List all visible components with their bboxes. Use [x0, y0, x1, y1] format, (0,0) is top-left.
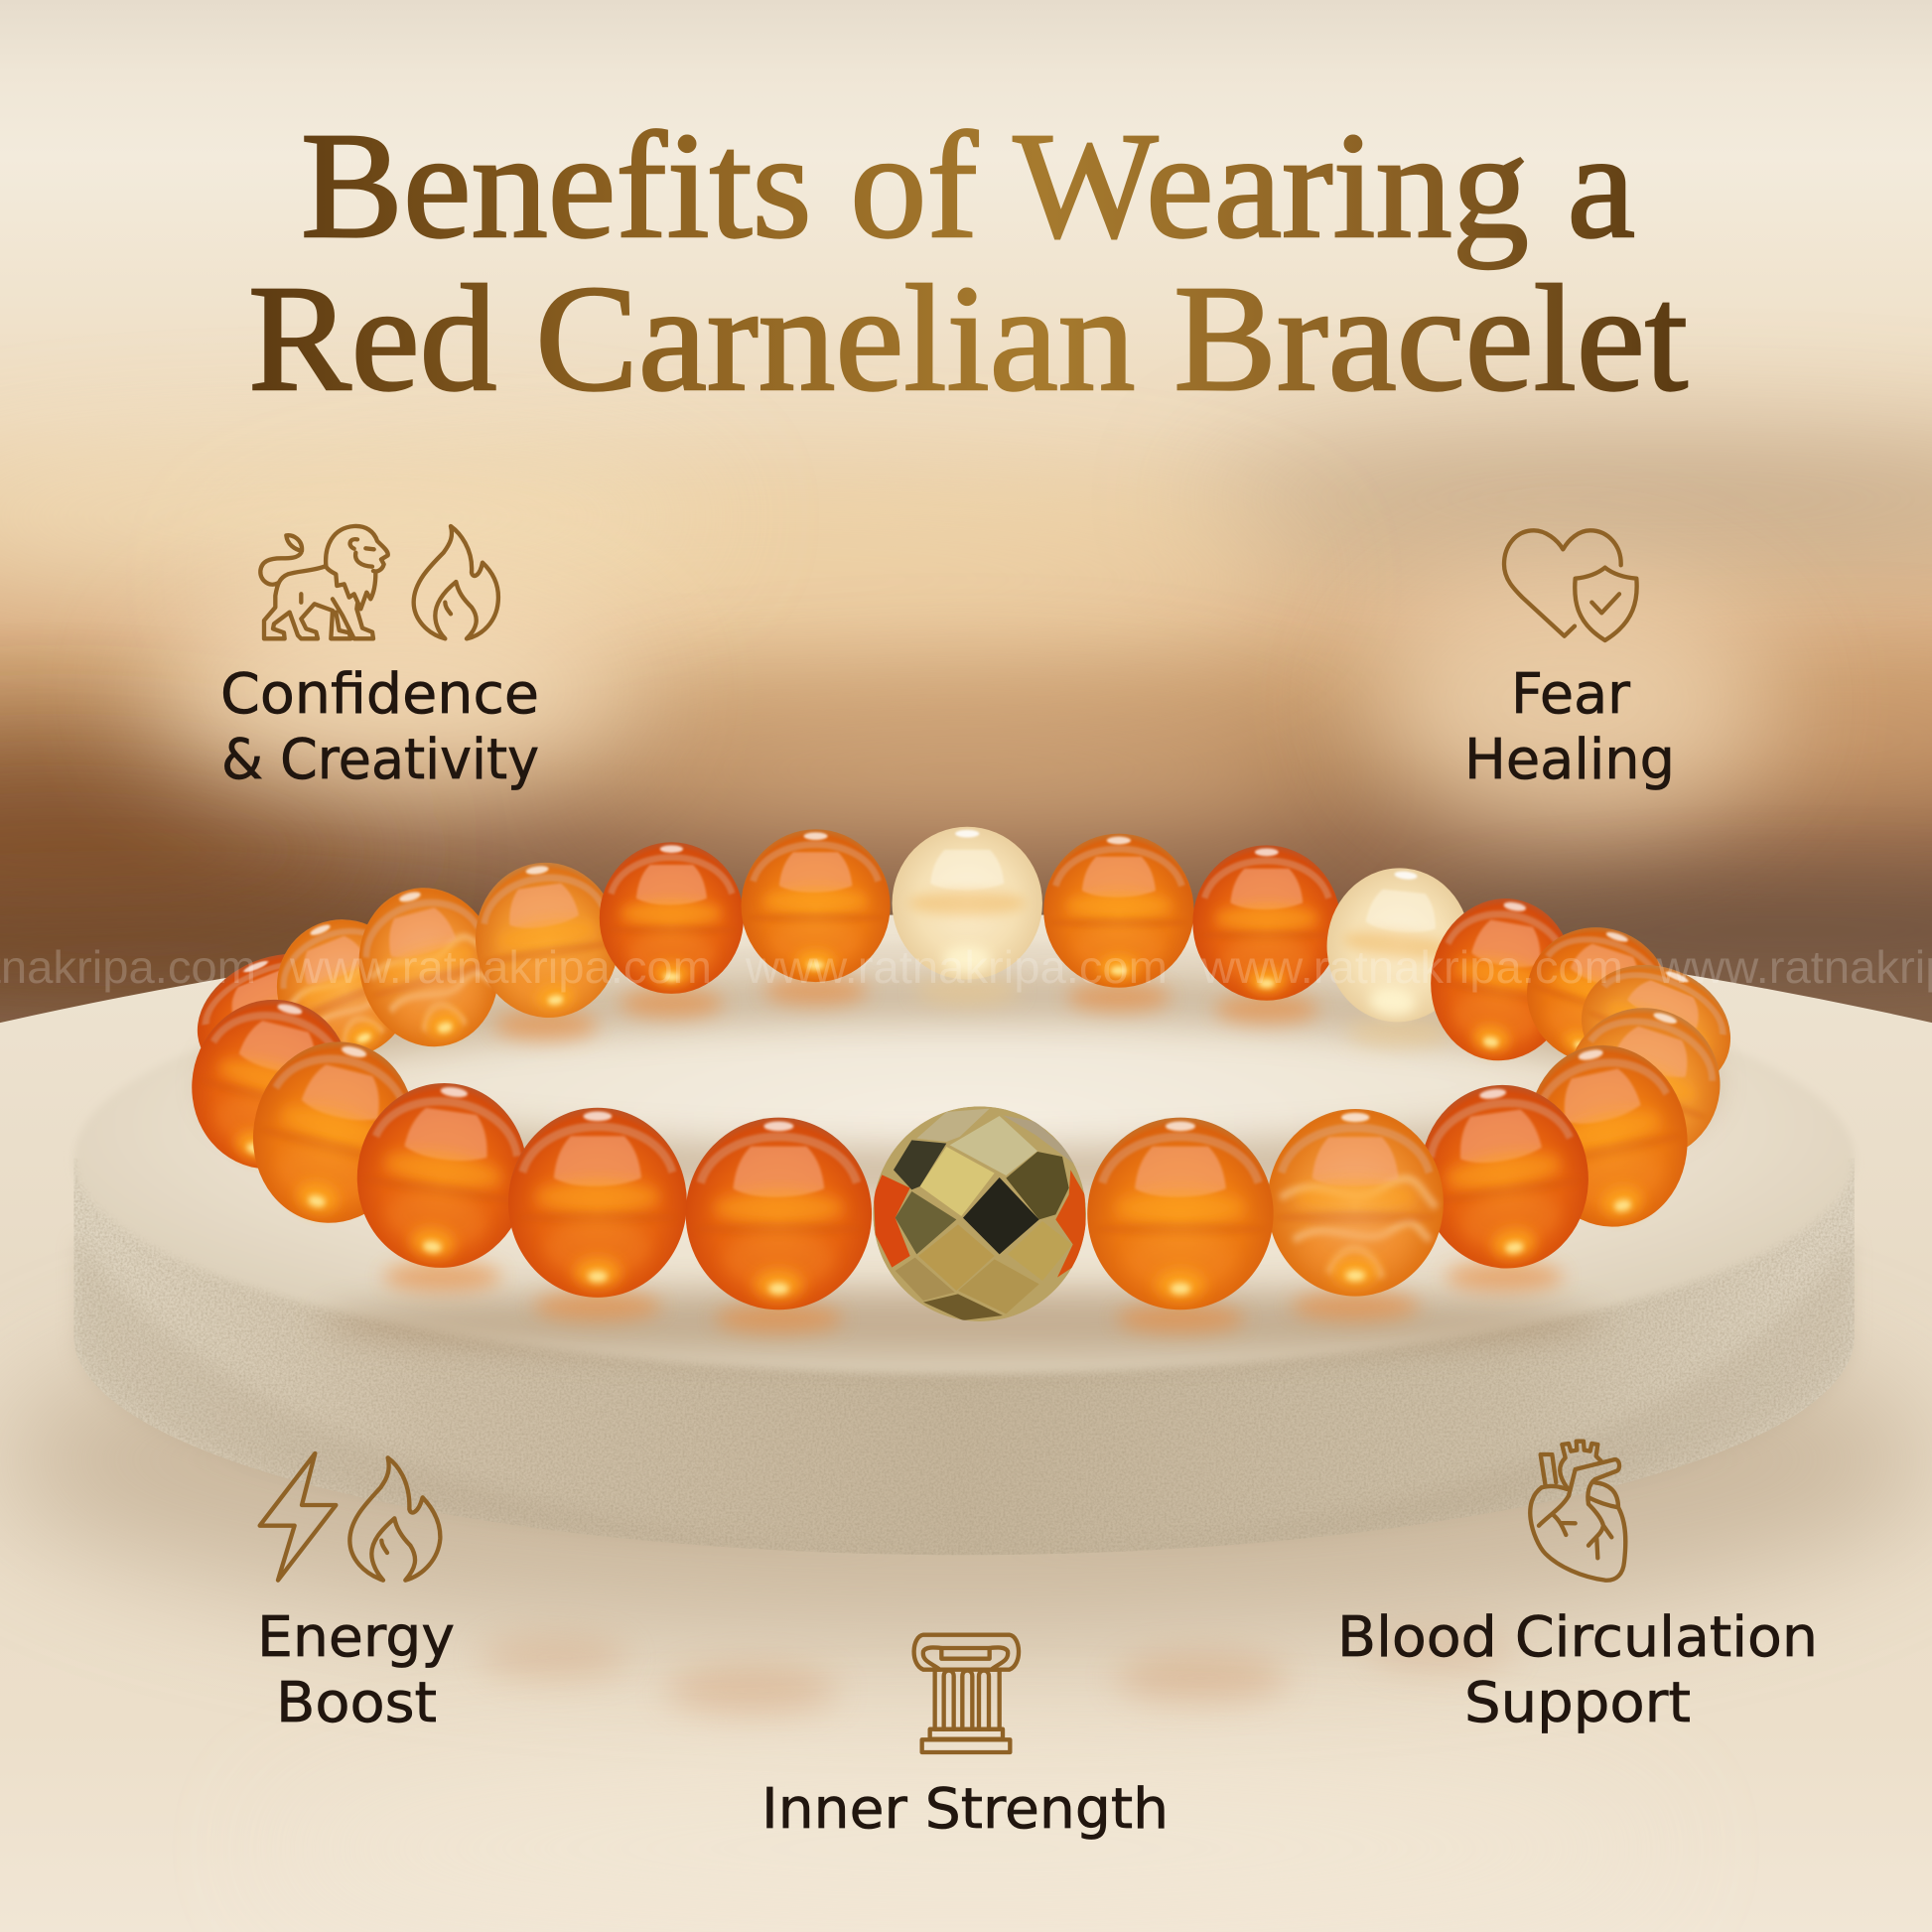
bead: back row left 3	[342, 872, 516, 1062]
icon: heart with shield	[1504, 530, 1637, 640]
bead: back row right 4	[1509, 909, 1687, 1082]
bead: back row far left	[179, 931, 373, 1102]
bead: back row left 2	[256, 899, 431, 1077]
icon: lion	[260, 526, 388, 638]
label	[1464, 662, 1675, 792]
bead: back row left 4	[466, 853, 628, 1027]
label: Confidence	[220, 662, 539, 727]
label: Energy	[257, 1605, 455, 1670]
bead: faceted gold pyrite	[873, 1106, 1086, 1321]
watermark: www.ratnakripa.com	[1200, 941, 1623, 993]
bead: right front 4	[1087, 1118, 1274, 1310]
label: Healing	[1464, 728, 1675, 792]
watermark: www.ratnakripa.com	[745, 941, 1168, 993]
callout: blood circulation support	[1337, 1442, 1818, 1735]
title	[248, 102, 1688, 423]
title: Benefits of Wearing a	[301, 102, 1635, 270]
label: Blood Circulation	[1337, 1605, 1818, 1670]
bead: back row right 2	[1192, 845, 1340, 1001]
bead: far right upper	[1562, 943, 1750, 1115]
label: Inner Strength	[761, 1777, 1169, 1842]
watermark	[0, 941, 1932, 993]
callout: inner strength	[761, 1635, 1169, 1842]
callout: fear healing	[1464, 530, 1675, 792]
bead: right front 1	[1512, 1031, 1704, 1242]
bead: left front 4	[686, 1118, 872, 1310]
bead: far left front	[174, 983, 368, 1185]
bead: back row right 1	[1043, 834, 1194, 988]
callout: energy boost	[257, 1453, 455, 1735]
icon: lightning bolt	[260, 1453, 336, 1581]
label: Boost	[276, 1671, 437, 1735]
label	[220, 662, 539, 792]
title: Red Carnelian Bracelet	[248, 255, 1688, 423]
watermark: www.ratnakripa.com	[289, 941, 712, 993]
icon: ionic column	[914, 1635, 1019, 1752]
bead: left front 3	[508, 1108, 687, 1298]
bead: right front banded	[1267, 1109, 1444, 1297]
callout: confidence and creativity	[220, 526, 539, 792]
icon: flame	[414, 526, 498, 638]
label	[1337, 1605, 1818, 1735]
bead: pale back right	[1319, 861, 1477, 1030]
bead: left front 1	[234, 1025, 434, 1240]
bracelet shadows	[234, 976, 1688, 1353]
bracelet	[174, 827, 1750, 1310]
bead: back row left 6	[742, 829, 891, 982]
bead: left front 2	[345, 1072, 539, 1279]
bead: back row left 5	[600, 842, 744, 994]
icon: anatomical heart	[1530, 1442, 1625, 1581]
bead: far right middle	[1548, 988, 1740, 1180]
label: Support	[1464, 1671, 1691, 1735]
bead: pale centre back	[893, 827, 1042, 980]
stone plinth	[73, 942, 1855, 1555]
icon: flame	[349, 1457, 440, 1581]
label: Fear	[1511, 662, 1631, 727]
label	[257, 1605, 455, 1735]
bead: back row right 3	[1418, 888, 1586, 1072]
label: & Creativity	[221, 728, 539, 792]
bead: right front 2	[1409, 1074, 1600, 1280]
